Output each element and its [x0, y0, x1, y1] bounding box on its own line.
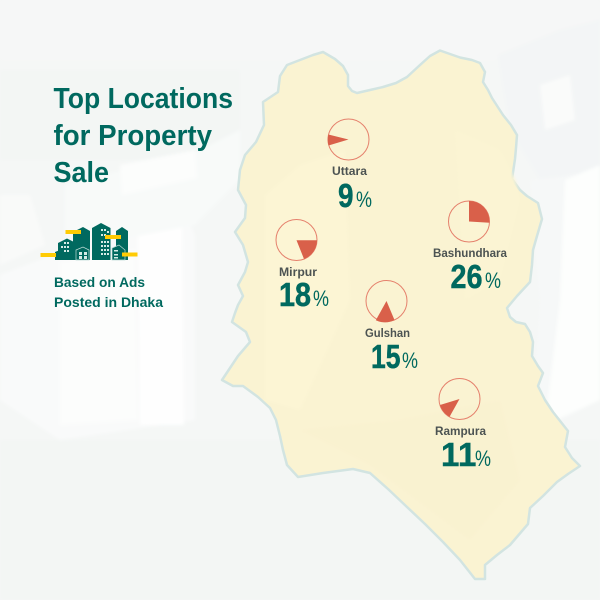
- location: Mirpur: [276, 220, 329, 313]
- location: Mirpur: Mirpur: [279, 267, 318, 279]
- location: Uttara: %: [356, 187, 372, 212]
- location: Rampura: 11: [441, 436, 476, 473]
- location: Rampura: %: [475, 446, 491, 471]
- map of Dhaka: [222, 50, 580, 579]
- location: Uttara: [328, 119, 372, 214]
- pie: Mirpur 18%: [276, 220, 317, 260]
- title: [54, 83, 233, 189]
- location: Bashundhara: [433, 201, 508, 295]
- location: Gulshan: [365, 280, 418, 375]
- location: Rampura: Rampura: [435, 426, 487, 438]
- title: for Property: [54, 120, 212, 152]
- location: Gulshan: 15: [371, 338, 400, 375]
- title: Sale: [54, 157, 109, 189]
- subtitle: [54, 274, 163, 310]
- subtitle: Based on Ads: [54, 274, 145, 290]
- pie: Gulshan 15%: [366, 280, 407, 322]
- location: Uttara: 9: [338, 177, 354, 214]
- location: Bashundhara: Bashundhara: [433, 248, 508, 260]
- icon: city buildings: [40, 223, 138, 260]
- location: Mirpur: %: [313, 286, 329, 311]
- pie: Uttara 9%: [328, 119, 369, 160]
- location: Rampura: [435, 378, 491, 473]
- location: Gulshan: %: [402, 348, 418, 373]
- pie: Rampura 11%: [439, 378, 480, 420]
- pie: Bashundhara 26%: [448, 201, 490, 242]
- location: Bashundhara: %: [485, 268, 501, 293]
- subtitle: Posted in Dhaka: [54, 294, 163, 310]
- location: Mirpur: 18: [279, 276, 311, 313]
- title: Top Locations: [54, 83, 233, 115]
- location: Gulshan: Gulshan: [365, 328, 410, 340]
- location: Uttara: Uttara: [332, 166, 368, 178]
- location: Bashundhara: 26: [450, 258, 482, 295]
